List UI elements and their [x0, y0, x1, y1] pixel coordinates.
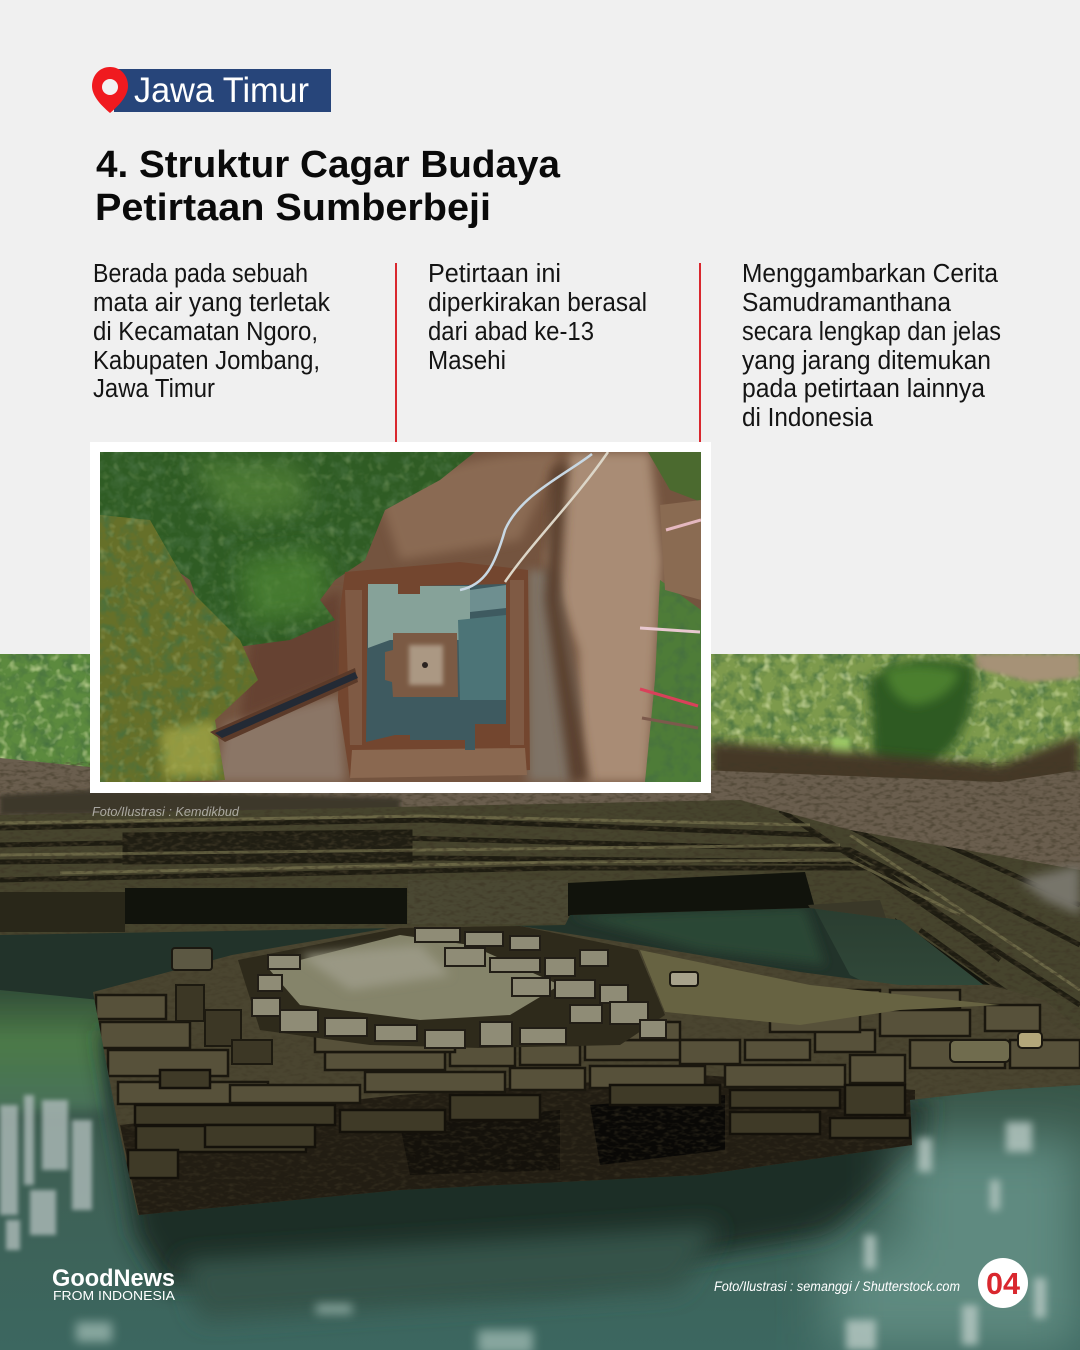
text column 2: diperkirakan berasal [428, 289, 647, 317]
green reflection at left [0, 985, 105, 1110]
text column 2: Petirtaan ini [428, 260, 561, 288]
divider 1 [395, 263, 397, 442]
text column 1: Jawa Timur [93, 375, 215, 403]
text column 1 [93, 260, 330, 403]
stepped stone terraces [0, 800, 1080, 1030]
muddy ground [0, 758, 1080, 880]
pond water [366, 584, 506, 750]
text column 1: di Kecamatan Ngoro, [93, 318, 318, 346]
divider 2 [699, 263, 701, 442]
text column 3: pada petirtaan lainnya [742, 375, 986, 403]
stone island in pond [385, 633, 458, 697]
text column 3 [742, 260, 1001, 432]
logo: GoodNews from Indonesia: GoodNews [52, 1265, 175, 1292]
text column 2: Masehi [428, 347, 506, 375]
text column 2: dari abad ke-13 [428, 318, 594, 346]
photo frame [90, 442, 711, 793]
pale rocks at right edge [1020, 865, 1080, 915]
icon: location pin [92, 67, 128, 113]
stone courses [96, 990, 1080, 1104]
text column 3: Menggambarkan Cerita [742, 260, 999, 288]
photo credit: aerial: Foto/Ilustrasi : Kemdikbud [92, 804, 240, 819]
olive tree canopy [100, 515, 260, 782]
dark recesses [125, 888, 407, 924]
mound stones [252, 928, 666, 1048]
badge: region label [92, 67, 331, 113]
water hoses [460, 454, 592, 590]
brick pond frame [338, 562, 530, 778]
sunlit upper platform [640, 950, 1000, 1025]
logo: GoodNews from Indonesia: FROM INDONESIA [53, 1288, 175, 1303]
text column 2 [428, 260, 647, 375]
green bank at right [700, 654, 1080, 792]
far water channel [0, 908, 858, 1000]
central stone island [80, 920, 1080, 1220]
light reflection at bottom centre [76, 1304, 533, 1350]
title: Petirtaan Sumberbeji [95, 187, 491, 229]
aerial photo with white frame [90, 442, 711, 793]
text column 1: Kabupaten Jombang, [93, 347, 320, 375]
red and white stakes [640, 520, 701, 728]
title: 4. Struktur Cagar Budaya [96, 144, 561, 186]
text column 3: di Indonesia [742, 404, 874, 432]
background photo: stone temple pool [0, 654, 1080, 1350]
text column 3: secara lengkap dan jelas [742, 318, 1001, 346]
drainage channel [210, 668, 358, 742]
paved stone mound [268, 935, 560, 1020]
bare soil [166, 452, 701, 782]
text column 3: Samudramanthana [742, 289, 952, 317]
page number badge: 04 [986, 1266, 1021, 1301]
title [95, 144, 561, 229]
right vegetation [645, 580, 701, 782]
green tree canopy [100, 452, 480, 652]
shaded lower courses [120, 1075, 915, 1220]
photo credit: main: Foto/Ilustrasi : semanggi / Shutterstock.com [714, 1279, 960, 1294]
white sky reflections at left [0, 1095, 92, 1250]
sky reflections at right [830, 1140, 1080, 1350]
text column 1: mata air yang terletak [93, 289, 330, 317]
text column 1: Berada pada sebuah [93, 260, 308, 288]
green bank at left [0, 654, 90, 767]
badge text: Jawa Timur [134, 71, 309, 110]
dark reflection of the island [100, 1030, 930, 1285]
water surface [0, 860, 1080, 1350]
badge background [114, 69, 331, 112]
loose stone blocks [172, 948, 1042, 1062]
page number badge [978, 1258, 1028, 1308]
text column 3: yang jarang ditemukan [742, 347, 991, 375]
